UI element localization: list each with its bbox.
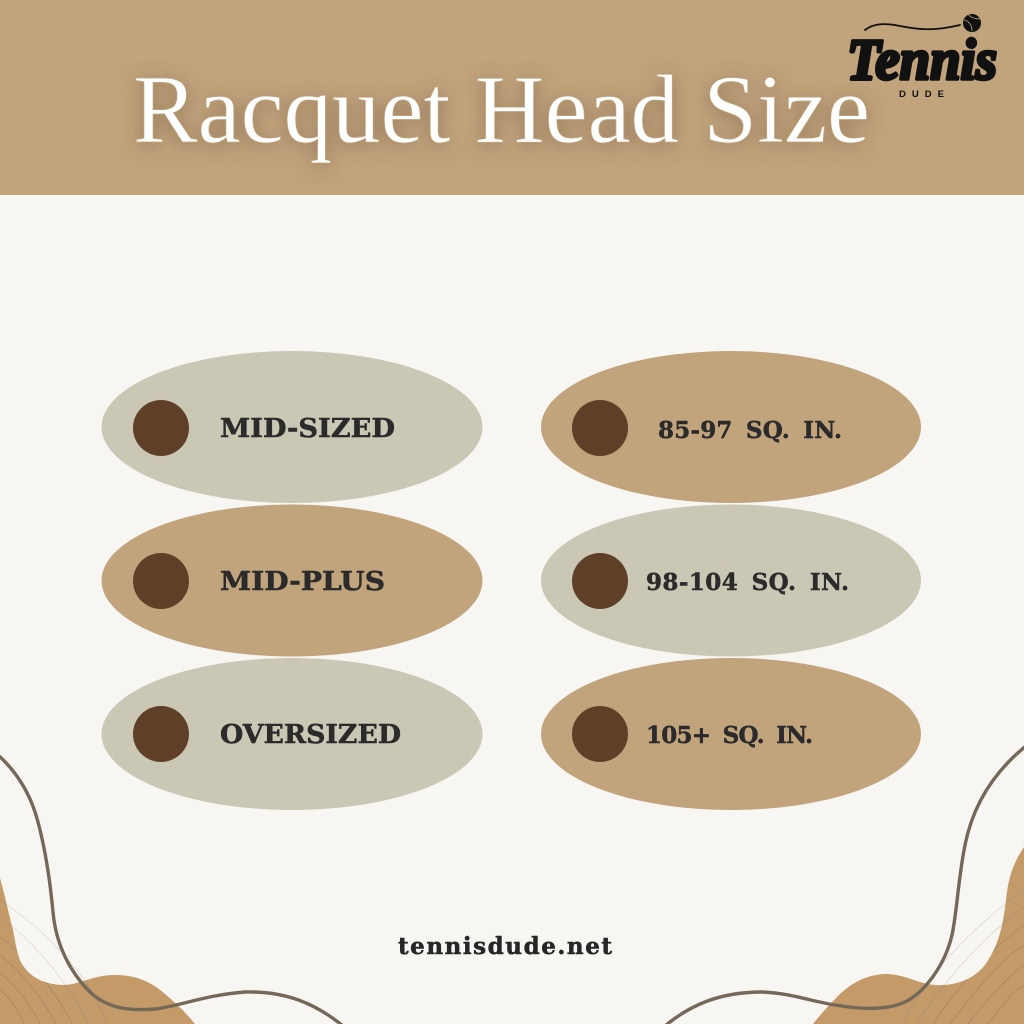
row 2 right pill: 98-104 sq. in.	[541, 504, 921, 656]
header band	[0, 0, 1024, 195]
row 3 right pill: 105+ sq. in.	[541, 658, 921, 810]
row 1 left pill: Mid-Sized: MID-SIZED	[220, 414, 395, 444]
row 3 left pill: Oversized	[102, 658, 482, 810]
website footer: tennisdude.net	[398, 933, 612, 960]
logo wordmark: Tennis	[847, 27, 997, 92]
decoration: bottom right arcs	[903, 890, 1024, 1024]
decoration: bottom left curve	[0, 755, 343, 1024]
logo: Tennis Dude	[847, 14, 997, 100]
row 2 right pill: 98-104 sq. in.: 98-104 SQ. IN.	[646, 569, 849, 596]
row 3 left pill: Oversized: OVERSIZED	[220, 720, 401, 750]
decoration: bottom left blob	[0, 878, 195, 1024]
row 1 left pill: Mid-Sized	[102, 351, 482, 503]
decoration: bottom right curve	[665, 746, 1024, 1024]
row 3 right pill: 105+ sq. in.: 105+ SQ. IN.	[646, 722, 813, 749]
logo swoosh	[865, 24, 960, 30]
row 2 left pill: Mid-Plus: MID-PLUS	[220, 567, 385, 597]
row 2 left pill: Mid-Plus	[102, 504, 482, 656]
decoration: bottom left arcs	[0, 900, 107, 1024]
row 1 right pill: 85-97 sq. in.	[541, 351, 921, 503]
logo subtitle: DUDE	[899, 89, 944, 100]
title: Racquet Head Size	[133, 56, 870, 164]
decoration: bottom right blob	[813, 847, 1024, 1024]
row 1 right pill: 85-97 sq. in.: 85-97 SQ. IN.	[658, 417, 842, 444]
logo tennis ball icon	[963, 14, 981, 32]
